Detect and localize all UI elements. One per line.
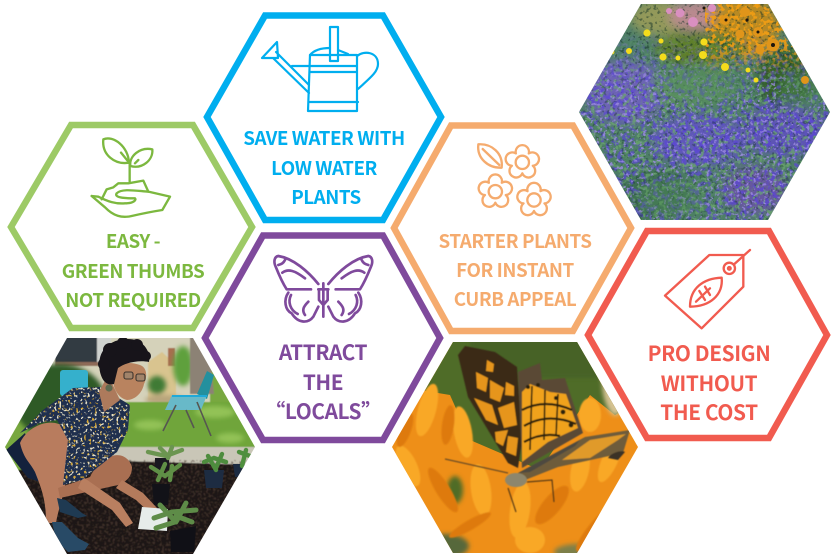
- panel: attract the locals: [205, 236, 440, 440]
- label: starter plants: FOR INSTANT: [456, 256, 575, 283]
- panel: easy, green thumbs not required: [11, 125, 252, 328]
- label: save water: LOW WATER: [271, 154, 378, 181]
- icon: watering can: [262, 27, 378, 111]
- potted plants and plant tag: [138, 447, 250, 552]
- garden background: [0, 335, 260, 560]
- panel: pro design: [588, 231, 827, 438]
- photo hexagon: flower garden: [575, 0, 833, 225]
- label: save water: PLANTS: [291, 183, 361, 210]
- label: attract the locals: “LOCALS”: [264, 395, 382, 425]
- label: attract the locals: THE: [303, 366, 343, 396]
- label: pro design: WITHOUT: [661, 367, 758, 397]
- label: starter plants: STARTER PLANTS: [439, 227, 591, 254]
- woman: [6, 337, 157, 552]
- icon: flowers and leaf: [478, 144, 551, 215]
- photo hexagon: woman planting in a garden: [0, 335, 260, 560]
- icon: seedling in hand: [92, 138, 170, 217]
- label: easy: EASY -: [106, 227, 161, 254]
- label: save water: SAVE WATER WITH: [243, 124, 405, 151]
- icon: butterfly: [274, 256, 372, 322]
- butterfly: [445, 346, 630, 512]
- icon: price tag with leaf: [665, 250, 750, 328]
- label: pro design: PRO DESIGN: [648, 337, 770, 367]
- panel: starter plants: [394, 126, 631, 331]
- orange petals: [391, 382, 627, 555]
- label: attract the locals: ATTRACT: [278, 336, 368, 366]
- label: easy: NOT REQUIRED: [65, 286, 201, 313]
- label: easy: GREEN THUMBS: [62, 257, 204, 284]
- label: pro design: THE COST: [660, 396, 758, 426]
- panel: save water: [207, 16, 441, 220]
- lawn chairs: [60, 370, 214, 436]
- photo hexagon: butterfly on orange milkweed: [388, 338, 642, 560]
- label: starter plants: CURB APPEAL: [454, 285, 577, 312]
